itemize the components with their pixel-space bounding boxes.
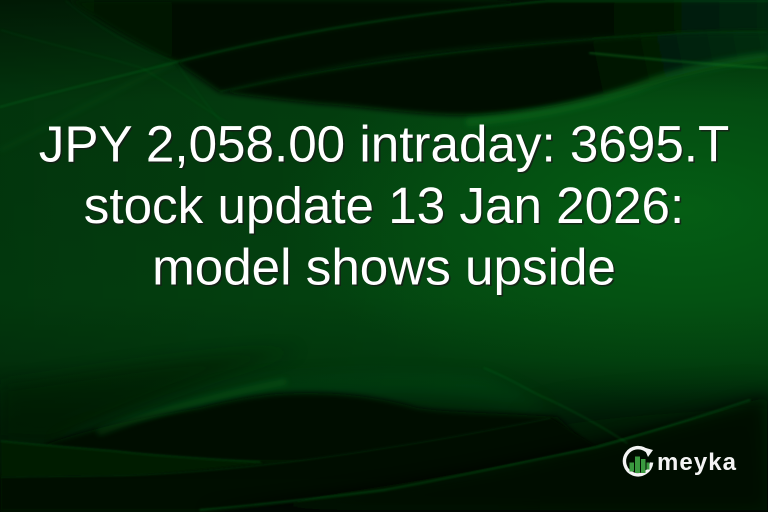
- lowest dark wedge: [1, 418, 597, 510]
- logo: meyka: [624, 448, 737, 476]
- bottom-right dark falloff: [540, 405, 767, 511]
- wordmark: meyka: [657, 449, 737, 476]
- icon: ring with bar chart: [624, 448, 653, 475]
- title: stock update 13 Jan 2026:: [85, 179, 686, 236]
- title: [39, 116, 731, 297]
- title: model shows upside: [154, 240, 617, 297]
- bright sweep above hill: [50, 373, 550, 443]
- top light lines: [0, 1, 768, 150]
- bottom dark hill: [1, 393, 590, 511]
- bottom band shading: [1, 350, 300, 443]
- title: stock update 13 Jan 2026:: [84, 177, 684, 234]
- bottom light lines: [1, 368, 750, 510]
- top dark wave: [70, 0, 548, 62]
- dark bowl under second line: [220, 32, 768, 115]
- title: JPY 2,058.00 intraday: 3695.T: [39, 116, 729, 172]
- title: model shows upside: [152, 238, 616, 295]
- title: JPY 2,058.00 intraday: 3695.T: [40, 117, 731, 174]
- lower-left strip below left line: [1, 441, 267, 477]
